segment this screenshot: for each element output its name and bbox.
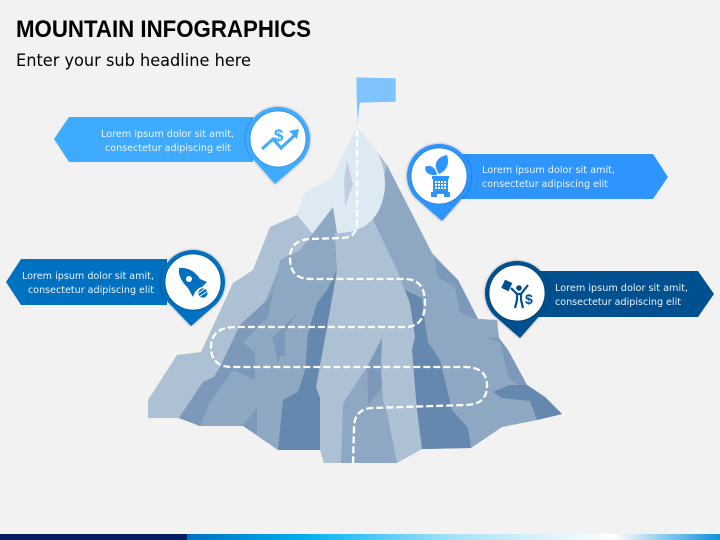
banner [54, 117, 253, 162]
snow cap shadow [344, 160, 353, 206]
pin [246, 107, 310, 184]
mountain center dark band [278, 270, 337, 450]
snow cap [297, 127, 385, 233]
mountain base silhouette [148, 127, 562, 463]
mountain left mid facet [179, 207, 337, 450]
icon: rising chart with dollar: $ [274, 126, 284, 145]
mountain right mid facet [373, 165, 562, 449]
banner text: Lorem ipsum dolor sit amit, [482, 165, 615, 176]
callout 1: growth [54, 107, 310, 184]
mountain illustration [148, 127, 562, 463]
mountain right upper shaded facet [434, 258, 478, 319]
banner text: consectetur adipiscing elit [28, 285, 154, 296]
icon: building with leaves [425, 155, 450, 197]
banner text [482, 165, 615, 190]
callout 4: business success [485, 261, 714, 338]
banner text [101, 129, 234, 154]
subtitle: Enter your sub headline here [16, 51, 251, 70]
flag [356, 77, 396, 127]
dashed path [211, 130, 487, 463]
mountain inner crevice [272, 312, 298, 365]
icon: rising chart with dollar [262, 126, 299, 149]
mountain right dark band [397, 270, 471, 449]
icon: person with briefcase and dollar [501, 280, 533, 308]
banner text: consectetur adipiscing elit [555, 297, 681, 308]
banner [517, 271, 714, 317]
mountain right lower shaded facet [486, 337, 527, 385]
footer gradient bar [0, 534, 720, 540]
pin [161, 250, 225, 326]
pin [407, 144, 471, 221]
callout 2: rocket [6, 250, 225, 326]
mountain lower center facet [341, 367, 397, 463]
banner text: Lorem ipsum dolor sit amit, [555, 283, 688, 294]
mountain small shaded triangle [243, 407, 257, 433]
banner text [22, 271, 154, 296]
icon: person with briefcase and dollar: $ [525, 291, 533, 307]
banner text: consectetur adipiscing elit [105, 143, 231, 154]
banner [439, 154, 668, 199]
banner text [555, 283, 688, 308]
banner text: consectetur adipiscing elit [482, 179, 608, 190]
banner text: Lorem ipsum dolor sit amit, [22, 271, 154, 282]
title: MOUNTAIN INFOGRAPHICS [16, 16, 311, 43]
mountain right foot lobe [493, 385, 562, 420]
mountain lower center shade [367, 338, 382, 405]
banner [6, 259, 167, 305]
banner text: Lorem ipsum dolor sit amit, [101, 129, 234, 140]
pin [485, 261, 549, 338]
mountain left shaded facet [179, 270, 278, 426]
snow cap mid triangle [313, 207, 337, 233]
callout 3: green building [407, 144, 668, 221]
flag cloth and pole [356, 77, 396, 127]
icon: rocket [179, 268, 208, 298]
